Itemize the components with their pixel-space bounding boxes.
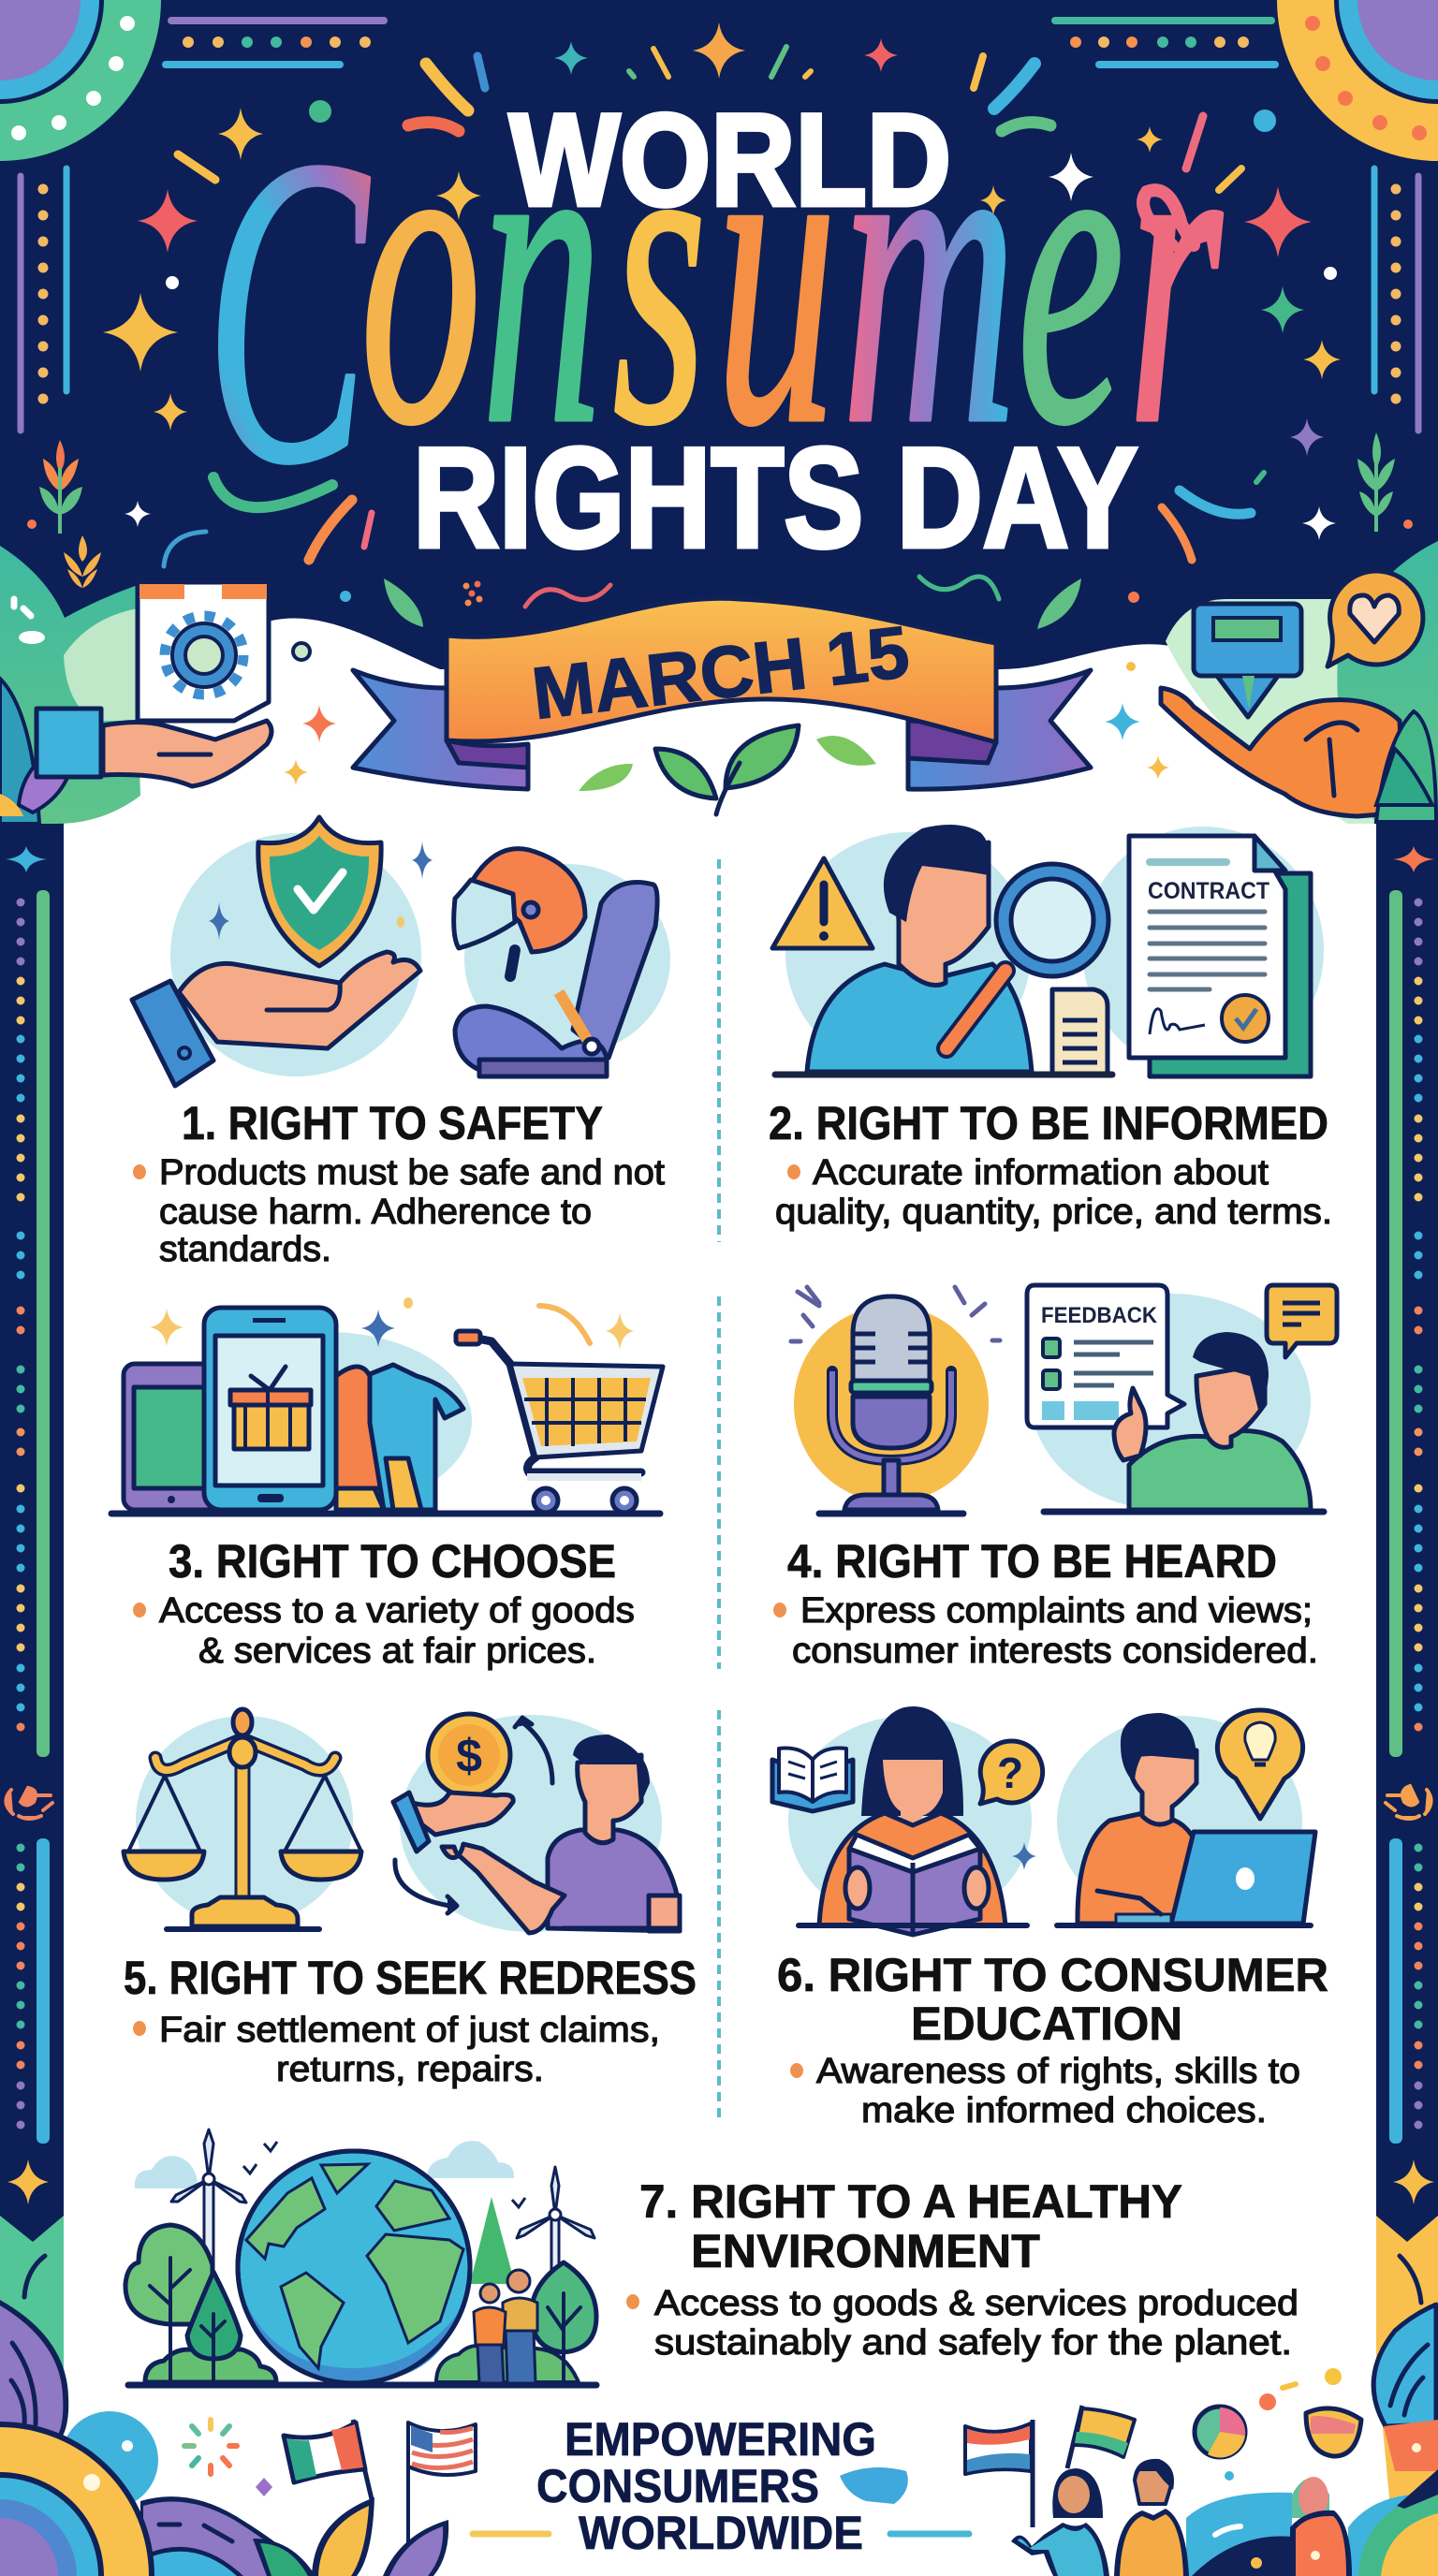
right floral cluster with signboard, speech bubble and hand — [1161, 541, 1438, 824]
heading: ENVIRONMENT — [691, 2225, 1040, 2277]
body text: sustainably and safely for the planet. — [654, 2323, 1292, 2363]
icon: small globe — [840, 2467, 908, 2504]
sparkles in the header — [27, 22, 1413, 603]
decorative dash left — [473, 2531, 549, 2537]
icon: crowd scene hills — [1186, 2469, 1438, 2576]
body text: returns, repairs. — [276, 2050, 544, 2089]
title word: Consumer: u — [715, 28, 837, 516]
heading: 7. RIGHT TO A HEALTHY — [639, 2175, 1182, 2228]
body text — [626, 2284, 1299, 2363]
decorative dash right — [890, 2531, 969, 2537]
contract label: CONTRACT — [1148, 878, 1269, 904]
title word: Consumer: e — [1017, 28, 1124, 516]
left floral cluster with document and hand — [0, 546, 271, 824]
leaves under banner — [579, 725, 876, 814]
icon: patterned badge — [1306, 2408, 1361, 2456]
heading: 4. RIGHT TO BE HEARD — [787, 1535, 1277, 1588]
body text — [773, 1591, 1318, 1671]
panel: right to choose — [111, 1297, 663, 1671]
header plants and leaves — [39, 432, 1395, 629]
heading: 6. RIGHT TO CONSUMER — [777, 1949, 1328, 2001]
corner ornament: top left — [0, 0, 161, 161]
icon: document with gear — [138, 582, 269, 721]
icon: pie chart bubble — [1195, 2407, 1245, 2457]
flourish on the last letter — [1143, 190, 1194, 245]
body text: Access to a variety of goods — [159, 1591, 635, 1631]
feedback label: FEEDBACK — [1041, 1303, 1158, 1328]
small accents on white — [284, 643, 1169, 785]
panel: right to safety — [132, 817, 670, 1269]
panel: right to be informed — [769, 825, 1332, 1232]
heading: 2. RIGHT TO BE INFORMED — [769, 1097, 1328, 1149]
body text: Fair settlement of just claims, — [159, 2011, 660, 2050]
footer slogan: WORLDWIDE — [579, 2507, 863, 2559]
icon: scales of justice — [124, 1709, 361, 1929]
panel: right to a healthy environment — [125, 2130, 1299, 2385]
left side column — [6, 846, 52, 2144]
body text: Products must be safe and not — [159, 1153, 665, 1193]
heading — [639, 2175, 1182, 2277]
banner text: MARCH 15 — [528, 610, 913, 735]
panel: right to be heard — [773, 1285, 1337, 1671]
body text: Accurate information about — [813, 1153, 1269, 1193]
right side column — [1386, 846, 1434, 2144]
corner ornament: top right — [1277, 0, 1438, 161]
icon: flag green yellow — [1067, 2406, 1135, 2468]
body text: make informed choices. — [861, 2091, 1267, 2130]
icon: signboard with pin — [1194, 604, 1301, 717]
icon: person with magnifier and contract — [772, 825, 1324, 1076]
confetti strokes in the header — [164, 47, 1264, 607]
title word: Consumer: C — [206, 67, 373, 555]
icon: woman waving — [1011, 2468, 1109, 2576]
title word: WORLD: WORLD — [509, 86, 951, 233]
banner: MARCH 15 — [353, 598, 1091, 789]
icon: heart speech bubble — [1328, 571, 1423, 666]
panel: right to consumer education — [772, 1706, 1328, 2130]
column dividers — [717, 859, 721, 2122]
heading: 1. RIGHT TO SAFETY — [182, 1097, 603, 1149]
icon: microphone and feedback form — [791, 1285, 1337, 1514]
body text — [133, 1153, 665, 1269]
footer slogan — [473, 2413, 969, 2559]
icon: man with laptop and idea — [1057, 1710, 1315, 1925]
icon: receiving orange hand — [1161, 688, 1404, 816]
white content panel — [0, 618, 1438, 2576]
body text — [790, 2052, 1300, 2130]
upper side bars and dots — [21, 168, 1418, 431]
heading — [777, 1949, 1328, 2050]
title word: Consumer: n — [481, 28, 603, 516]
icon: giving hand — [37, 709, 271, 786]
title: WORLD CONSUMER RIGHTS DAY — [206, 28, 1226, 578]
heading: 3. RIGHT TO CHOOSE — [169, 1535, 616, 1588]
body text: & services at fair prices. — [198, 1632, 596, 1671]
icon: earth, trees and wind turbines — [125, 2130, 596, 2385]
lower right ornaments — [965, 2153, 1438, 2576]
body text — [133, 2011, 660, 2089]
top border bars and dots — [166, 21, 1275, 65]
question mark: ? — [997, 1749, 1023, 1797]
title word: Consumer: o — [360, 28, 481, 516]
icon: man — [1114, 2459, 1189, 2576]
icon: Italian flag — [284, 2420, 372, 2499]
title word: RIGHTS DAY: RIGHTS DAY — [413, 418, 1137, 578]
icon: woman in orange — [1290, 2477, 1352, 2576]
icon: helmet and car seat — [454, 849, 670, 1076]
body text — [133, 1591, 635, 1671]
heading: 5. RIGHT TO SEEK REDRESS — [124, 1952, 697, 2004]
body text: Awareness of rights, skills to — [816, 2052, 1300, 2091]
body text: consumer interests considered. — [792, 1632, 1318, 1671]
icon: flag striped — [965, 2420, 1033, 2527]
title word: Consumer: s — [613, 28, 707, 516]
ribbon body — [447, 598, 996, 742]
panel: right to seek redress — [124, 1709, 697, 2089]
body text: quality, quantity, price, and terms. — [775, 1193, 1332, 1232]
body text: cause harm. Adherence to — [159, 1193, 592, 1232]
ribbon left tail — [353, 670, 528, 789]
dollar sign: $ — [456, 1730, 482, 1782]
heading: EDUCATION — [911, 1998, 1182, 2050]
lower left ornaments — [0, 2153, 448, 2576]
body text — [775, 1153, 1332, 1232]
icon: phones, clothes and cart — [111, 1297, 663, 1514]
icon: colourful burst — [184, 2420, 237, 2474]
icon: refund with coin and person — [393, 1714, 680, 1933]
title word: Consumer: m — [842, 28, 1017, 516]
title word: Consumer: r — [1128, 28, 1226, 516]
body text: Access to goods & services produced — [654, 2284, 1299, 2323]
icon: American flag — [408, 2422, 476, 2543]
icon: hand with shield — [132, 817, 433, 1086]
body text: Express complaints and views; — [800, 1591, 1313, 1631]
footer slogan: EMPOWERING — [565, 2413, 876, 2466]
icon: reading woman — [772, 1706, 1043, 1935]
footer slogan: CONSUMERS — [536, 2460, 819, 2512]
ribbon right tail — [908, 670, 1091, 789]
body text: standards. — [159, 1230, 331, 1269]
